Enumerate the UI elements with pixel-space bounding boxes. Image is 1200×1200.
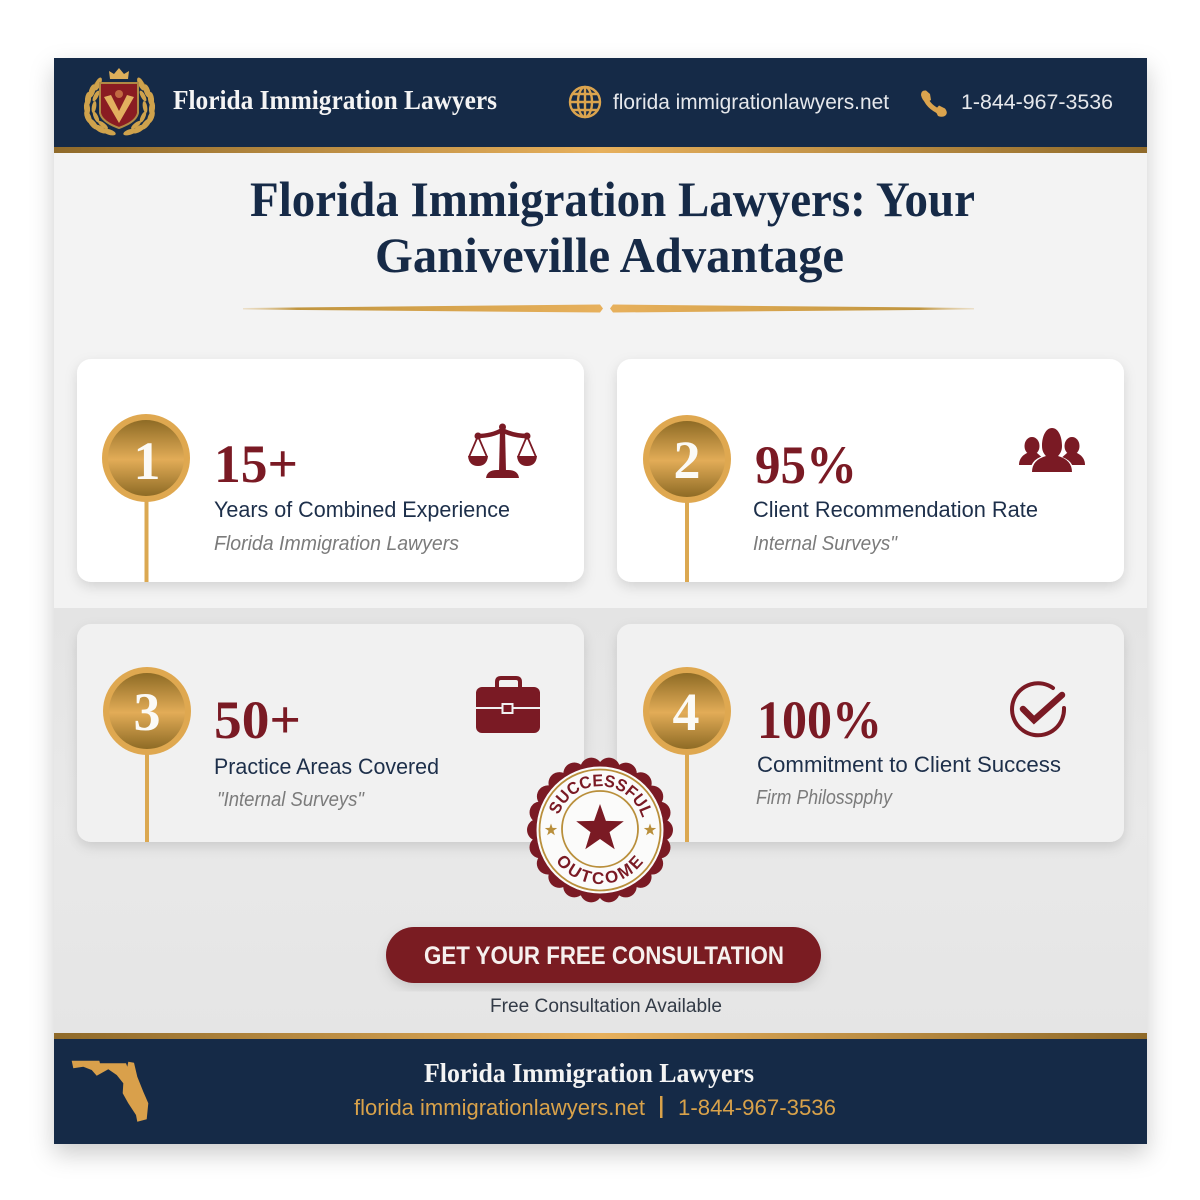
panel: footer bar: [54, 1033, 1147, 1144]
seal: successful outcome: SUCCESSFUL: [550, 774, 651, 818]
footer contact line: florida immigrationlawyers.net: [354, 1095, 645, 1120]
number badge 4: [643, 667, 731, 755]
gold divider: [243, 304, 974, 312]
stat 15+: 15+: [214, 434, 298, 494]
number badge 2: 2: [674, 430, 700, 490]
number badge 1: 1: [134, 431, 160, 491]
button: free consultation: [386, 927, 821, 983]
stat label 4: Commitment to Client Success: [757, 752, 1061, 777]
seal: successful outcome: [527, 758, 673, 902]
button: free consultation: GET YOUR FREE CONSULTATION: [424, 942, 784, 970]
stat label 3: Practice Areas Covered: [214, 754, 439, 779]
header title: Florida Immigration Lawyers: [173, 85, 497, 115]
title: Florida Immigration Lawyers: Your: [250, 171, 975, 227]
header phone: 1-844-967-3536: [961, 91, 1113, 114]
panel: card 1: [77, 359, 584, 582]
stat 100%: 100%: [757, 690, 882, 750]
footer contact line: [354, 1095, 836, 1120]
stat label 2: Client Recommendation Rate: [753, 497, 1038, 522]
icon: people: [1019, 428, 1085, 473]
panel: card 2: [617, 359, 1124, 582]
panel: card 4: [617, 624, 1124, 842]
icon: Florida map: [72, 1061, 148, 1122]
icon: phone: [921, 90, 947, 117]
connector stem 3: [145, 750, 149, 842]
seal: successful outcome: OUTCOME: [558, 855, 644, 884]
source 4: Firm Philosspphy: [756, 787, 893, 809]
header website: florida immigrationlawyers.net: [613, 91, 889, 114]
stat 95%: 95%: [755, 435, 857, 495]
stat 50+: 50+: [214, 690, 301, 750]
connector stem 4: [685, 750, 689, 842]
source 1: Florida Immigration Lawyers: [214, 533, 459, 555]
number badge 2: [643, 415, 731, 503]
icon: check circle: [1012, 683, 1064, 735]
number badge 4: 4: [672, 682, 700, 742]
number badge 3: [103, 667, 191, 755]
connector stem 2: [685, 500, 689, 582]
icon: crest logo: [83, 68, 156, 137]
number badge 1: [102, 414, 190, 502]
caption under button: Free Consultation Available: [490, 996, 722, 1017]
panel: header bar: [54, 58, 1147, 153]
number badge 3: 3: [134, 682, 160, 742]
title: Ganiveville Advantage: [375, 227, 844, 283]
panel: card 3: [77, 624, 584, 842]
icon: briefcase: [476, 678, 540, 733]
connector stem 1: [144, 500, 148, 582]
source 3: "Internal Surveys": [217, 789, 365, 811]
source 2: Internal Surveys": [753, 533, 898, 555]
icon: globe: [570, 87, 600, 117]
stat label 1: Years of Combined Experience: [214, 497, 510, 522]
title: [250, 171, 975, 283]
icon: scales: [468, 424, 537, 478]
footer contact line: 1-844-967-3536: [678, 1095, 836, 1120]
footer name: Florida Immigration Lawyers: [424, 1058, 754, 1088]
